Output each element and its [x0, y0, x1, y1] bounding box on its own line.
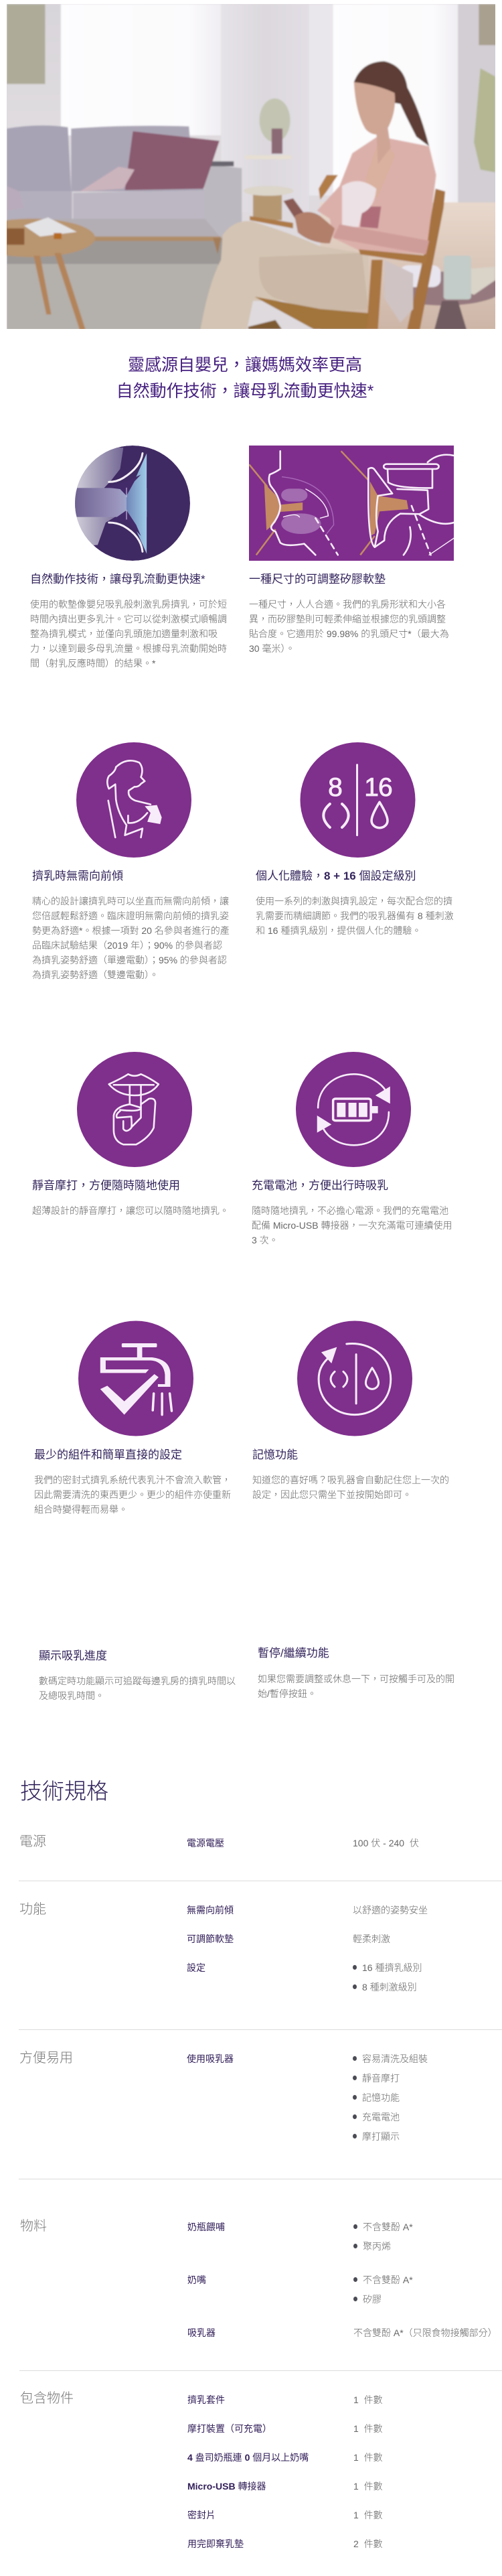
light beam [72, 488, 147, 517]
text: 靜音摩打 [362, 2073, 400, 2084]
spec row: no lean: 以舒適的姿勢安坐 [353, 1905, 428, 1915]
feature heading: pause and resume: 暫停/繼續功能 [258, 1647, 329, 1659]
text: 8 種刺激級別 [362, 1982, 417, 1992]
feature text: one size cushion: 貼合度。它適用於 99.98% 的乳頭尺寸*（最大為 [249, 628, 449, 639]
room background [0, 0, 502, 339]
icon: 8 and 16 settings: 8 [328, 773, 343, 802]
feature heading: progress display: 顯示吸乳進度 [39, 1649, 107, 1662]
feature text: battery [252, 1205, 452, 1245]
icon: woman sitting upright while pumping [76, 742, 191, 858]
spec row: no lean: 無需向前傾 [187, 1905, 234, 1915]
plant and side shelf [244, 98, 293, 220]
spec row: kit [187, 2394, 383, 2405]
icon: rechargeable battery [296, 1052, 411, 1167]
feature text: natural motion: 間（射乳反應時間）的結果。* [30, 658, 155, 669]
feature heading: natural motion: 自然動作技術，讓母乳流動更快速* [30, 573, 205, 586]
spec row: motor: 摩打裝置（可充電） [187, 2423, 272, 2434]
feature text: personalised settings: 乳需要而精細調節。我們的吸乳器備有 8 種刺激 [256, 910, 454, 921]
spec row: voltage: 電源電壓 [187, 1838, 224, 1848]
text: 矽膠 [363, 2294, 382, 2305]
title: 自然動作技術，讓母乳流動更快速* [116, 382, 373, 401]
blue cushion band [127, 454, 147, 554]
feature text: memory: 知道您的喜好嗎？吸乳器會自動記住您上一次的 [252, 1475, 449, 1485]
feature text: no leaning forward: 精心的設計讓擠乳時可以坐直而無需向前傾，讓 [32, 896, 229, 906]
spec row: adapter: 1 件數 [353, 2481, 383, 2492]
feature heading: battery: 充電電池，方便出行時吸乳 [252, 1179, 388, 1192]
feature text: pause and resume: 始/暫停按鈕。 [258, 1688, 317, 1699]
text: 摩打顯示 [362, 2131, 400, 2142]
baby mouth [269, 451, 338, 555]
spec row: motor [187, 2423, 383, 2434]
specifications heading: 技術規格 [20, 1779, 108, 1804]
feature text: fewer parts: 因此需要清洗的東西更少。更少的組件亦使重新 [34, 1489, 231, 1500]
feature text: natural motion: 整為擠乳模式，並僅向乳頭施加適量刺激和吸 [30, 628, 218, 639]
feature text: natural motion: 使用的軟墊像嬰兒吸乳般刺激乳房擠乳，可於短 [30, 599, 227, 610]
woman: trousers [200, 221, 368, 331]
feature text: quiet motor: 超薄設計的靜音摩打，讓您可以隨時隨地擠乳。 [32, 1205, 229, 1216]
feature text: no leaning forward: 品臨床試驗結果（2019 年）；90% 的參與者認 [32, 940, 222, 951]
icon: memory function [297, 1321, 412, 1436]
spec section: features: 功能 [19, 1902, 46, 1917]
spec row: bottle feeding [187, 2222, 413, 2252]
spec row: voltage: 100 伏 - 240 伏 [353, 1838, 419, 1848]
spec row: settings: 設定 [187, 1962, 205, 1973]
feature text: progress display [39, 1676, 236, 1701]
feature text: fewer parts: 組合時變得輕而易舉。 [34, 1504, 128, 1515]
spec row: adjustable cushion: 輕柔刺激 [353, 1934, 390, 1944]
chair seat and arm [248, 249, 428, 329]
feature text: one size cushion [249, 599, 449, 654]
silicone white lines [109, 454, 143, 482]
spec row: sealing disc: 1 件數 [353, 2510, 383, 2520]
spec row: sealing disc: 密封片 [187, 2510, 216, 2520]
icon: 8 and 16 settings: 16 [364, 773, 392, 802]
feature heading: memory: 記憶功能 [252, 1448, 298, 1461]
feature text: fewer parts: 我們的密封式擠乳系統代表乳汁不會流入軟管， [34, 1475, 231, 1485]
spec row: pump material: 吸乳器 [187, 2327, 216, 2338]
feature text: no leaning forward: 為擠乳姿勢舒適（單邊電動）；95% 的參與者認 [32, 955, 227, 965]
feature text: natural motion: 時間內擠出更多乳汁。它可以從刺激模式順暢調 [30, 614, 227, 624]
woman: cardigan and torso [317, 136, 436, 255]
spec row: no lean [187, 1905, 428, 1915]
feature text: no leaning forward: 您倍感輕鬆舒適。臨床證明無需向前傾的擠乳姿 [32, 910, 229, 921]
feature text: no leaning forward [32, 896, 230, 980]
spec row: disposable pads: 2 件數 [353, 2538, 383, 2549]
feature heading: quiet motor: 靜音摩打，方便隨時隨地使用 [32, 1179, 180, 1192]
orange breast shapes [249, 451, 408, 555]
right side table with device and glass [402, 68, 495, 329]
spec row: adjustable cushion [187, 1934, 390, 1944]
spec row: bottle [187, 2452, 383, 2463]
icon: quiet motor, finger on lips [77, 1052, 192, 1167]
feature text: progress display: 數碼定時功能顯示可追蹤每邊乳房的擠乳時間以 [39, 1676, 236, 1686]
feature heading: one size cushion: 一種尺寸的可調整矽膠軟墊 [249, 573, 386, 586]
spec row: disposable pads [187, 2538, 383, 2549]
feature text: progress display: 及總吸乳時間。 [39, 1690, 104, 1701]
feature text: personalised settings: 使用一系列的刺激與擠乳設定，每次配合您的擠 [256, 896, 452, 906]
spec section: included items: 包含物件 [20, 2391, 74, 2406]
coffee table [0, 218, 95, 331]
sofa [7, 125, 242, 255]
wooden chair back [319, 175, 445, 331]
feature text: battery: 隨時隨地擠乳，不必擔心電源。我們的充電電池 [252, 1205, 448, 1216]
feature heading: fewer parts: 最少的組件和簡單直接的設定 [34, 1448, 182, 1461]
title: 靈感源自嬰兒，讓媽媽效率更高 [128, 356, 362, 375]
spec row: motor: 1 件數 [353, 2423, 383, 2434]
feature heading: no leaning forward: 擠乳時無需向前傾 [32, 870, 123, 882]
spec row: bottle feeding: 不含雙酚 A* [363, 2222, 413, 2232]
spec section: ease of use: 方便易用 [19, 2051, 73, 2065]
feature text: memory: 設定，因此您只需坐下並按開始即可。 [252, 1489, 412, 1500]
feature text: personalised settings: 和 16 種擠乳級別，提供個人化的體驗。 [256, 925, 421, 936]
feature text: one size cushion: 30 毫米）。 [249, 643, 295, 654]
spec row: using the pump [187, 2053, 428, 2142]
spec row: teat: 不含雙酚 A* [363, 2275, 413, 2285]
feature text: personalised settings [256, 896, 454, 936]
spec row: teat: 奶嘴 [187, 2275, 206, 2285]
spec row: disposable pads: 用完即棄乳墊 [187, 2538, 244, 2549]
spec row: using the pump: 使用吸乳器 [187, 2053, 234, 2064]
title [116, 356, 373, 401]
feature text: no leaning forward: 為擠乳姿勢舒適（雙邊電動）。 [32, 969, 159, 980]
spec row: kit: 擠乳套件 [187, 2394, 225, 2405]
feature text: natural motion: 力，以達到最多母乳流量。根據母乳流動開始時 [30, 643, 227, 654]
spec row: using the pump: 容易清洗及組裝 [362, 2053, 428, 2064]
spec row: kit: 1 件數 [353, 2394, 383, 2405]
spec row: adapter: Micro-USB 轉接器 [187, 2481, 266, 2492]
spec row: pump material [187, 2327, 497, 2338]
spec row: settings [187, 1962, 422, 1992]
grey bottle upper left [75, 448, 123, 545]
hero photo: mother using breast pump in living room [0, 0, 502, 339]
feature text: no leaning forward: 勢更為舒適*。根據一項對 20 名參與者進行的產 [32, 925, 230, 936]
feature text: one size cushion: 異，而矽膠墊則可輕柔伸縮並根據您的乳頭調整 [249, 614, 446, 624]
text: 記憶功能 [362, 2092, 400, 2103]
feature text: one size cushion: 一種尺寸，人人合適。我們的乳房形狀和大小各 [249, 599, 446, 610]
text: 聚丙烯 [363, 2241, 391, 2252]
feature text: fewer parts [34, 1475, 231, 1515]
pump flange and bottle [368, 455, 454, 555]
icon: faucet with tick, easy cleaning [78, 1321, 193, 1436]
woman: head and hair [354, 61, 429, 164]
spec row: adapter [187, 2481, 383, 2492]
text: 充電電池 [362, 2112, 400, 2122]
spec row: settings: 16 種擠乳級別 [362, 1962, 422, 1973]
spec row: bottle feeding: 奶瓶餵哺 [187, 2222, 225, 2232]
spec row: bottle: 4 盎司奶瓶連 0 個月以上奶嘴 [187, 2452, 309, 2463]
feature text: pause and resume [258, 1674, 454, 1699]
feature heading: personalised settings: 個人化體驗，8 + 16 個設定級別 [256, 870, 416, 882]
image: baby latch compared with silicone cushion [249, 446, 454, 561]
spec section: power: 電源 [19, 1834, 46, 1849]
spec row: pump material: 不含雙酚 A*（只限食物接觸部分） [353, 2327, 497, 2338]
icon: 8 and 16 settings [300, 742, 415, 858]
feature text: pause and resume: 如果您需要調整或休息一下，可按觸手可及的開 [258, 1674, 454, 1684]
woman: phone and hand [250, 198, 335, 243]
spec row: adjustable cushion: 可調節軟墊 [187, 1934, 234, 1944]
feature text: natural motion [30, 599, 227, 669]
spec section: materials: 物料 [20, 2219, 47, 2234]
feature text: battery: 3 次。 [252, 1235, 278, 1245]
spec row: sealing disc [187, 2510, 383, 2520]
spec row: voltage [187, 1838, 419, 1848]
image: natural motion silicone cushion cross-section [72, 444, 190, 561]
feature text: battery: 配備 Micro-USB 轉接器，一次充滿電可連續使用 [252, 1220, 452, 1231]
feature text: memory [252, 1475, 449, 1500]
spec row: bottle: 1 件數 [353, 2452, 383, 2463]
cushions [7, 131, 220, 192]
spec row: teat [187, 2275, 413, 2305]
